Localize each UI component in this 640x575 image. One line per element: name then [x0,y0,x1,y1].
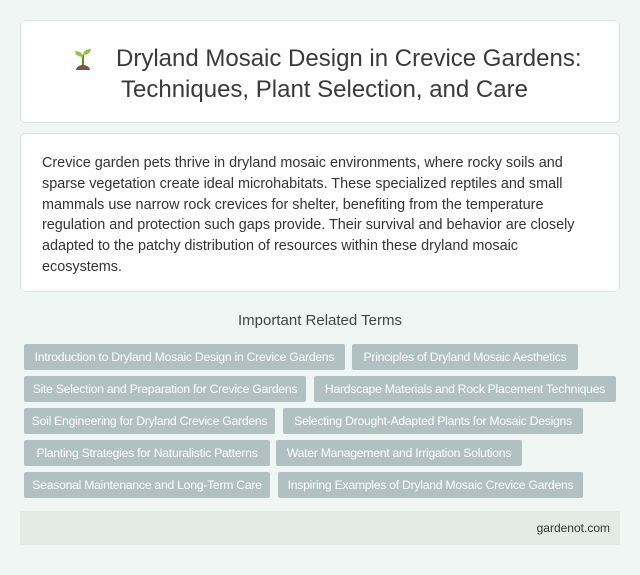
tags: Water Management and Irrigation Solutions [287,446,511,460]
tags: Hardscape Materials and Rock Placement Techniques [325,382,605,396]
section heading: Important Related Terms [238,312,402,329]
tags: Principles of Dryland Mosaic Aesthetics [364,350,566,364]
title [116,45,582,103]
tags: Inspiring Examples of Dryland Mosaic Crevice Gardens [288,478,573,492]
icon: seedling [75,49,91,70]
footer [20,511,620,545]
tags: Introduction to Dryland Mosaic Design in Crevice Gardens [35,350,334,364]
header card [20,20,620,123]
title: Dryland Mosaic Design in Crevice Gardens: [116,45,582,72]
intro text card [20,133,620,292]
title: Techniques, Plant Selection, and Care [121,76,528,103]
tags: Planting Strategies for Naturalistic Patterns [36,446,258,460]
intro paragraph: Crevice garden pets thrive in dryland mosaic environments, where rocky soils and sparse vegetation create ideal microhabitats. These specialized reptiles and small mammals use narrow rock crevices for shelter, benefiting from the temperature regulation and protection such gaps provide. Their survival and behavior are closely adapted to the patchy distribution of resources within these dryland mosaic ecosystems. [42,155,574,275]
footer text: gardenot.com [537,521,610,535]
tags: Soil Engineering for Dryland Crevice Gardens [32,414,267,428]
tags: Seasonal Maintenance and Long-Term Care [32,478,262,492]
tags: Site Selection and Preparation for Crevice Gardens [33,382,297,396]
tags: Selecting Drought-Adapted Plants for Mosaic Designs [294,414,572,428]
